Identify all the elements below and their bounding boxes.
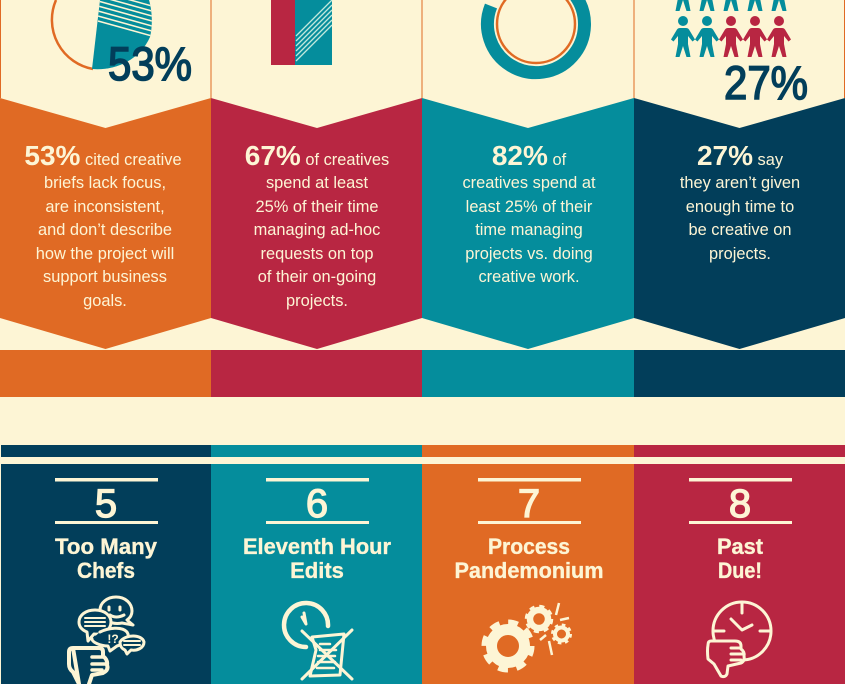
panel: people pictogram stat <box>671 0 808 109</box>
card: 53% creative briefs: briefs lack focus, <box>44 174 166 192</box>
panel: ring chart stat <box>487 0 584 73</box>
card: 67% ad-hoc requests: spend at least <box>266 174 368 192</box>
card: 27% not enough time: enough time to <box>686 198 794 216</box>
number 6: 6 <box>306 482 328 526</box>
panel: pie chart stat <box>52 0 192 90</box>
card: 53% creative briefs: goals. <box>83 292 127 310</box>
value: 27%: 27% <box>724 56 808 109</box>
number 5: 5 <box>95 482 117 526</box>
pie chart <box>52 0 152 69</box>
card: 67% ad-hoc requests: of their on-going <box>258 268 376 286</box>
card: 53% creative briefs <box>0 98 211 349</box>
heading: Past <box>717 534 764 559</box>
card: 53% creative briefs: 53% cited creative <box>24 140 182 171</box>
card: 27% not enough time <box>634 98 845 349</box>
heading: Eleventh Hour <box>243 534 391 559</box>
color band: lower <box>1 445 845 457</box>
card: 27% not enough time: they aren’t given <box>680 174 800 192</box>
panel: 8 Past Due! <box>634 464 845 684</box>
icon: speech bubbles and thumb down <box>69 597 144 684</box>
heading: Process <box>488 534 570 559</box>
number 7: 7 <box>518 482 540 526</box>
panel: bar chart stat <box>271 0 332 65</box>
card: 82% managing projects: projects vs. doing <box>465 245 593 263</box>
card: 53% creative briefs: how the project will <box>36 245 174 263</box>
card: 67% ad-hoc requests: 67% of creatives <box>245 140 389 171</box>
card: 53% creative briefs: and don’t describe <box>38 221 172 239</box>
card: 67% ad-hoc requests: managing ad-hoc <box>254 221 380 239</box>
card: 82% managing projects <box>422 98 634 349</box>
card: 27% not enough time: be creative on <box>689 221 791 239</box>
card: 82% managing projects: creative work. <box>478 268 580 286</box>
number 8: 8 <box>729 482 751 526</box>
card: 27% not enough time: 27% say <box>697 140 784 171</box>
icon: broken gears <box>484 603 570 670</box>
panel: 8 Past Due!: Due! <box>718 558 762 583</box>
card: 82% managing projects: creatives spend at <box>462 174 596 192</box>
value: 53%: 53% <box>108 37 192 90</box>
card: 82% managing projects: least 25% of their <box>466 198 593 216</box>
card: 67% ad-hoc requests <box>211 98 422 349</box>
panel: 7 Process Pandemonium <box>422 464 634 684</box>
icon: clock and thumb down <box>708 602 771 677</box>
card: 67% ad-hoc requests: 25% of their time <box>256 198 378 216</box>
icon: clock and crossed document <box>284 603 352 679</box>
panel: 7 Process Pandemonium: Pandemonium <box>454 558 604 583</box>
card: 53% creative briefs: are inconsistent, <box>45 198 165 216</box>
card: 82% managing projects: time managing <box>475 221 583 239</box>
panel: 5 Too Many Chefs: Chefs <box>77 558 135 583</box>
icon: speech bubbles and thumb down: !? <box>107 632 119 646</box>
card: 82% managing projects: 82% of <box>492 140 567 171</box>
color band: upper <box>0 350 845 397</box>
heading: Too Many <box>55 534 158 559</box>
card: 53% creative briefs: support business <box>43 268 167 286</box>
panel: 5 Too Many Chefs <box>1 464 211 684</box>
card: 67% ad-hoc requests: projects. <box>286 292 348 310</box>
panel: 6 Eleventh Hour Edits <box>211 464 422 684</box>
card: 27% not enough time: projects. <box>709 245 771 263</box>
card: 67% ad-hoc requests: requests on top <box>260 245 374 263</box>
panel: 6 Eleventh Hour Edits: Edits <box>290 558 344 583</box>
